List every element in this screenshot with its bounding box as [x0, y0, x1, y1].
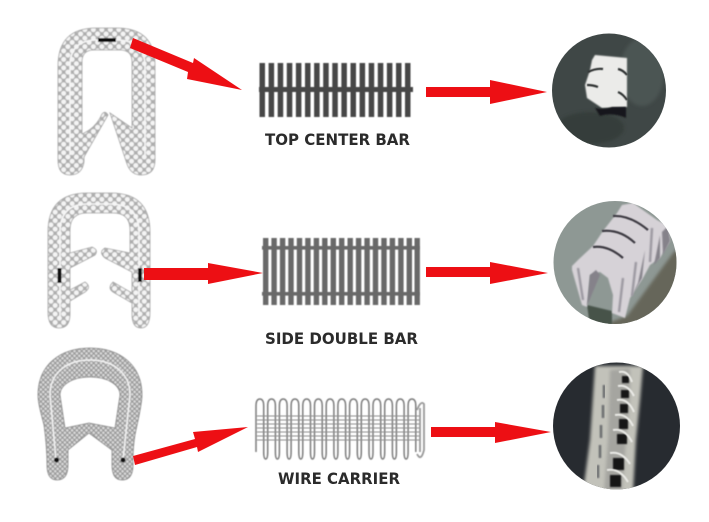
arrow: profile to wire carrier [133, 427, 248, 465]
label: top center bar: TOP CENTER BAR [265, 130, 410, 149]
arrow: bar to photo 1 [426, 80, 547, 104]
photo: wire carrier clip [553, 362, 680, 490]
arrow: profile to side double bar [144, 263, 263, 284]
arrow: coil to photo 3 [431, 422, 551, 443]
bar strip: side double bar [262, 238, 420, 305]
panel: wire carrier row [38, 348, 685, 495]
label: side double bar: SIDE DOUBLE BAR [265, 329, 418, 348]
photo: top center bar clip [550, 30, 670, 150]
wire carrier coil [256, 399, 424, 459]
bar strip: top center bar [259, 63, 413, 117]
seal profile: side double bar [48, 193, 150, 328]
photo: side double bar clip [554, 201, 676, 324]
arrow: bar to photo 2 [426, 262, 548, 284]
arrow: profile to top center bar [130, 38, 242, 90]
label: wire carrier: WIRE CARRIER [278, 469, 400, 488]
seal profile: wire carrier [38, 348, 142, 480]
seal profile: top center bar [58, 28, 155, 175]
panel: top center bar row [58, 28, 670, 175]
panel: side double bar row [48, 193, 680, 348]
